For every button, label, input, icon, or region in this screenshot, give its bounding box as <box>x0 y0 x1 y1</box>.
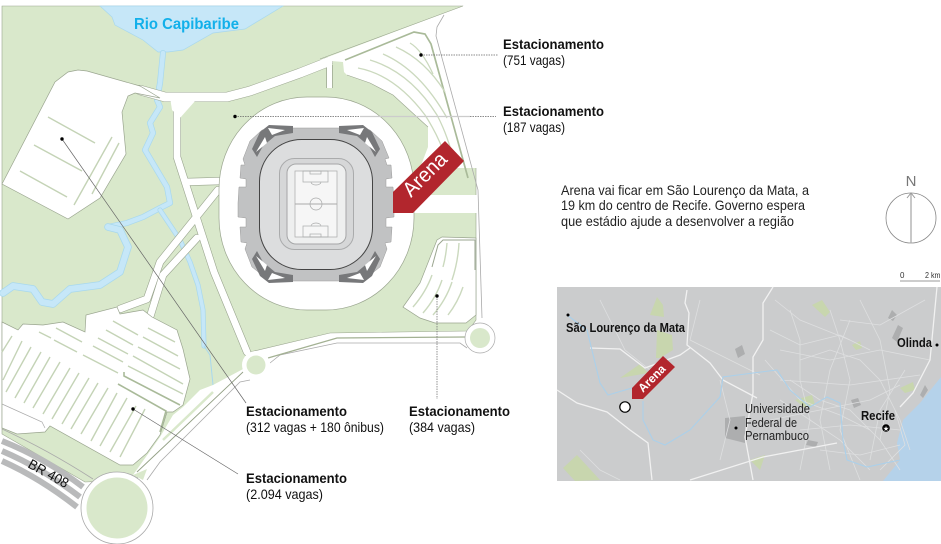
leader dots <box>60 53 439 411</box>
text block: description: Arena vai ficar em São Lourenço da Mata, a <box>561 182 809 198</box>
roundabout: southwest <box>81 472 153 544</box>
location: Arena marker <box>632 356 675 399</box>
location: Recife: ★ <box>883 425 889 433</box>
panel: site map <box>2 6 495 544</box>
stadium stands <box>280 158 354 250</box>
callout: 384 spaces: Estacionamento <box>409 403 510 419</box>
location: São Lourenço da Mata <box>566 314 686 335</box>
minor road network <box>580 300 930 480</box>
label: Arena banner <box>393 141 464 213</box>
callout: 751 spaces <box>503 36 604 68</box>
text block: description: que estádio ajude a desenvolver a região <box>561 213 794 229</box>
location: Universidade Federal de Pernambuco: Pernambuco <box>745 428 809 443</box>
label: Rio Capibaribe: Rio Capibaribe <box>134 16 239 33</box>
location: Universidade Federal de Pernambuco: Federal de <box>745 415 797 430</box>
location: Universidade Federal de Pernambuco: Universidade <box>745 401 810 416</box>
callout: 751 spaces: Estacionamento <box>503 36 604 52</box>
location: Recife <box>861 408 895 433</box>
rivers <box>567 315 900 467</box>
stadium plaza <box>219 97 414 310</box>
scale bar: 0 <box>900 271 905 280</box>
football pitch <box>295 171 337 237</box>
callout: 2,094 spaces <box>246 470 347 502</box>
road junction <box>170 97 196 118</box>
stadium outer shell <box>238 128 394 281</box>
access road to roundabout <box>133 368 250 480</box>
stadium corner pylons <box>252 125 380 283</box>
band to arena <box>412 195 477 213</box>
callout: 187 spaces: Estacionamento <box>503 103 604 119</box>
stadium <box>238 125 394 283</box>
callout: 187 spaces <box>503 103 604 135</box>
panel: locator map <box>557 287 941 481</box>
roundabout: east <box>465 323 495 353</box>
green areas <box>563 297 915 481</box>
stadium inner ring <box>260 140 372 270</box>
main roads <box>557 287 937 480</box>
roundabout: center <box>242 351 270 379</box>
parking: 2,094 spaces <box>2 307 190 465</box>
icon: compass: N <box>906 173 916 190</box>
text block: description: 19 km do centro de Recife. Governo espera <box>561 197 805 213</box>
callout: 2,094 spaces: (2.094 vagas) <box>246 486 323 502</box>
location: Recife: Recife <box>861 408 895 423</box>
callout: 2,094 spaces: Estacionamento <box>246 470 347 486</box>
location: stadium point <box>620 402 630 412</box>
callout: 384 spaces: (384 vagas) <box>409 419 475 435</box>
river channels <box>3 53 213 385</box>
green terrain <box>2 6 476 482</box>
river mouth <box>100 6 283 52</box>
location: São Lourenço da Mata: São Lourenço da Mata <box>566 320 686 335</box>
parking: 312 spaces + 180 buses <box>2 70 160 219</box>
sea <box>883 377 941 481</box>
location: Arena marker: Arena <box>635 362 669 395</box>
scale bar <box>900 271 941 281</box>
parking: 751 spaces <box>320 6 482 318</box>
callout: 384 spaces <box>409 403 510 435</box>
icon: compass <box>886 173 936 243</box>
road: BR 408 <box>2 429 93 507</box>
callout: 312 spaces <box>246 403 384 435</box>
callout: 312 spaces: Estacionamento <box>246 403 347 419</box>
map background <box>557 287 941 481</box>
callout: 187 spaces: (187 vagas) <box>503 119 565 135</box>
label: Arena banner: Arena <box>398 148 452 202</box>
leader lines <box>62 55 498 474</box>
bottom road <box>268 337 467 363</box>
road network <box>120 60 330 352</box>
callout: 751 spaces: (751 vagas) <box>503 52 565 68</box>
callout: 312 spaces: (312 vagas + 180 ônibus) <box>246 419 384 435</box>
label: BR 408: BR 408 <box>26 456 72 491</box>
location: Olinda: Olinda <box>897 335 933 350</box>
text block: description <box>561 182 809 229</box>
darker urban patches <box>725 310 928 447</box>
location: Universidade Federal de Pernambuco <box>734 401 810 443</box>
parking: 384 spaces <box>403 237 476 323</box>
stadium inner stand <box>287 164 346 244</box>
